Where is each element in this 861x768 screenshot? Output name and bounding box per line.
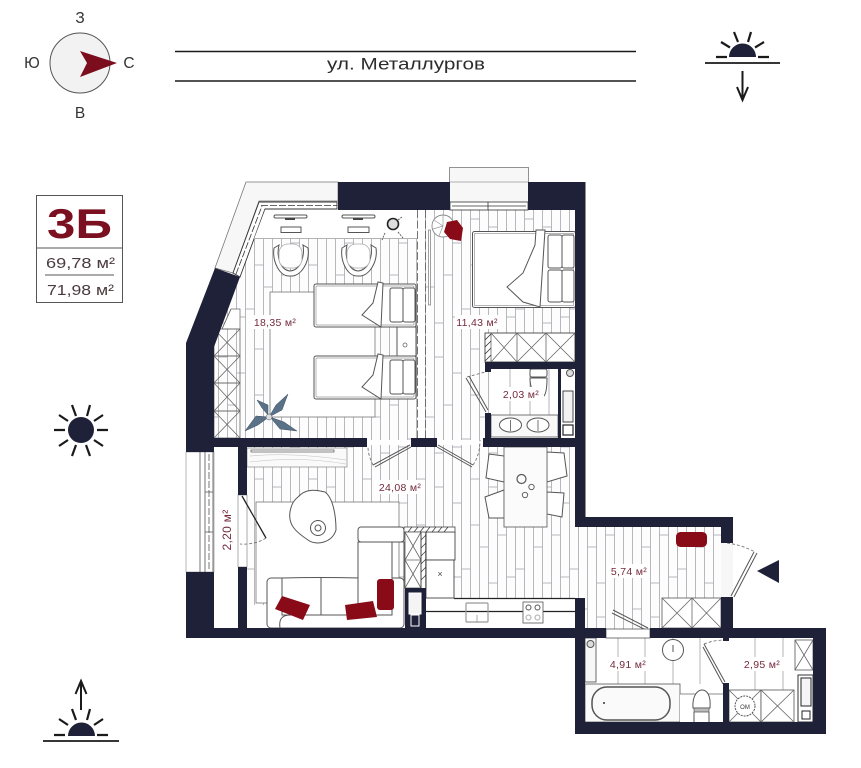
master bed: [472, 230, 576, 308]
compass: В: [75, 105, 85, 122]
room area labels: [220, 315, 784, 671]
icon: sink: [662, 640, 684, 660]
compass: Ю: [24, 55, 40, 72]
closet units: ОМ: [740, 705, 750, 711]
icon: toilet: [530, 369, 547, 398]
window: master bedroom: [450, 168, 528, 210]
icon: bathtub: [585, 684, 680, 722]
walls: [186, 182, 826, 734]
floor plan: [186, 168, 826, 734]
parquet floors: [214, 210, 723, 630]
door: lower bathroom: [606, 610, 650, 638]
room area labels: 2,95 м²: [744, 659, 780, 671]
icon: toilet: [680, 690, 723, 722]
carpet living room: [256, 502, 399, 603]
room area labels: 2,20 м²: [220, 509, 234, 551]
room area labels: 11,43 м²: [456, 317, 498, 329]
icon: sun west: [54, 405, 108, 456]
icon: washer column: [561, 369, 575, 438]
unit badge: 71,98 м²: [47, 282, 114, 299]
closet units: [729, 640, 813, 722]
street name: ул. Металлургов: [327, 56, 485, 74]
dark column with appliance: [405, 588, 426, 628]
bathroom 2.03: [491, 369, 575, 438]
wardrobe bedroom: [214, 309, 240, 438]
door: bathroom 2.03: [466, 372, 488, 412]
coffee table: [290, 490, 336, 543]
doors to living room: [368, 440, 480, 467]
beds bedroom: [314, 282, 416, 399]
sliding partition: [418, 210, 430, 438]
wardrobe master bedroom: [485, 333, 575, 362]
icon: blue plant: [245, 394, 297, 431]
dining table with chairs: [485, 447, 567, 527]
compass: З: [75, 10, 85, 27]
icon: plant in bedroom corner: [382, 217, 403, 240]
icon: washer: [585, 638, 596, 682]
room area labels: 18,35 м²: [254, 317, 296, 329]
street name: [175, 52, 636, 81]
wardrobe living room: [247, 448, 347, 467]
compass: С: [123, 55, 135, 72]
window: bedroom top-left sill: [215, 182, 338, 277]
desk area: [254, 210, 417, 239]
room area labels: 2,03 м²: [503, 389, 539, 401]
entrance door: [721, 543, 757, 597]
room 2.20: [214, 447, 266, 628]
kitchen: [404, 527, 576, 628]
icon: sunset top right: [705, 32, 780, 100]
unit badge: 69,78 м²: [46, 255, 115, 272]
room area labels: 4,91 м²: [610, 659, 646, 671]
icon: sinks: [500, 418, 549, 432]
icon: sink: [466, 603, 488, 623]
compass: [24, 10, 135, 122]
window: west: [186, 452, 214, 572]
icon: red armchair: [432, 215, 463, 241]
carpet bedroom: [270, 292, 375, 417]
sofa: [267, 527, 404, 628]
lower rooms: [585, 638, 813, 722]
red cushions: [275, 579, 394, 620]
wardrobe kitchen: [405, 532, 426, 588]
icon: entrance arrow: [757, 560, 779, 583]
icon: sunrise bottom left: [43, 681, 119, 741]
hall furniture: [662, 532, 721, 628]
room area labels: 5,74 м²: [611, 566, 647, 578]
door: closet: [703, 640, 725, 684]
armchairs: [274, 244, 376, 276]
room area labels: 24,08 м²: [379, 482, 421, 494]
unit badge: 3Б: [47, 200, 112, 247]
kitchen: ×: [437, 569, 443, 579]
icon: hob: [523, 602, 543, 623]
unit badge: [36, 196, 122, 302]
desk lamps and items: [274, 215, 375, 232]
